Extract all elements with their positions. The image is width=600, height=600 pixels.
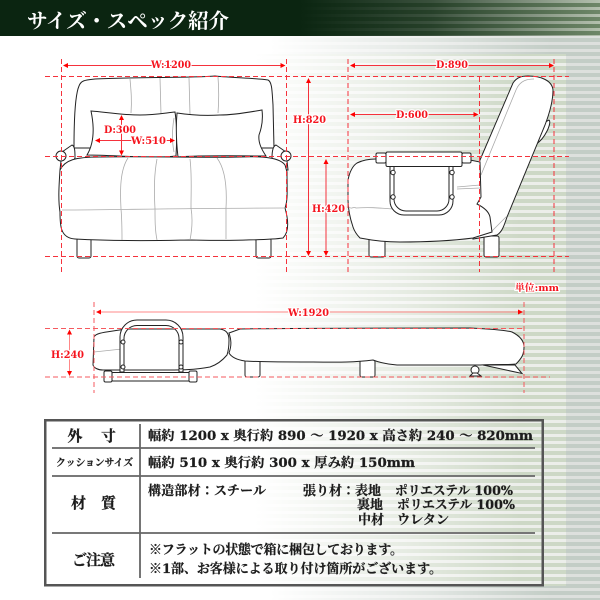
row: cushion size: 幅約 510 x 奥行約 300 x 厚み約 150mm <box>148 455 415 471</box>
row: materials: 構造部材：スチール <box>148 483 266 499</box>
row: outer dimensions <box>68 427 533 445</box>
row: materials: 質 <box>101 494 118 512</box>
dimension labels: D:600 <box>396 110 428 121</box>
dimension arrows <box>63 63 554 376</box>
row: notes: ※フラットの状態で箱に梱包しております。 <box>149 542 403 558</box>
row: cushion size <box>56 455 415 471</box>
side view sofa drawing <box>348 76 553 257</box>
row: materials: 材 <box>71 494 86 512</box>
dimension labels: 単位:mm <box>515 282 559 294</box>
dimension labels: H:240 <box>51 350 84 361</box>
row: outer dimensions: 外 <box>68 427 83 445</box>
dimension labels: D:890 <box>436 60 468 71</box>
dimension labels: W:510 <box>130 136 166 147</box>
dimension labels: H:820 <box>293 115 326 126</box>
dashed measurement guides <box>45 59 569 393</box>
dimension labels: D:300 <box>104 125 136 136</box>
row: materials: 中材 <box>358 512 384 528</box>
row: materials: 張り材： <box>303 483 355 499</box>
dimension labels: H:420 <box>312 204 345 215</box>
front view sofa drawing <box>56 76 291 258</box>
header banner <box>0 0 600 36</box>
spec table frame <box>45 420 543 585</box>
row: outer dimensions: 寸 <box>101 427 116 445</box>
row: outer dimensions: 幅約 1200 x 奥行約 890 ～ 1920 x 高さ約 240 ～ 820mm <box>148 428 533 444</box>
row: notes: ご注意 <box>72 551 116 569</box>
row: materials <box>71 483 516 528</box>
flat view sofa drawing <box>93 320 524 382</box>
dimension labels: W:1920 <box>287 308 329 319</box>
row: notes <box>72 542 442 577</box>
dimension labels <box>51 60 559 361</box>
header banner: サイズ・スペック紹介 <box>27 9 230 33</box>
row: cushion size: クッションサイズ <box>56 457 133 469</box>
row: materials: 裏地 <box>357 497 383 513</box>
row: notes: ※1部、お客様による取り付け箇所がございます。 <box>149 561 442 577</box>
row: materials: ウレタン <box>397 513 449 528</box>
row: materials: ポリエステル 100% <box>395 484 514 499</box>
row: materials: 表地 <box>355 483 381 499</box>
row: materials: ポリエステル 100% <box>397 498 516 513</box>
dimension labels: W:1200 <box>150 60 191 71</box>
